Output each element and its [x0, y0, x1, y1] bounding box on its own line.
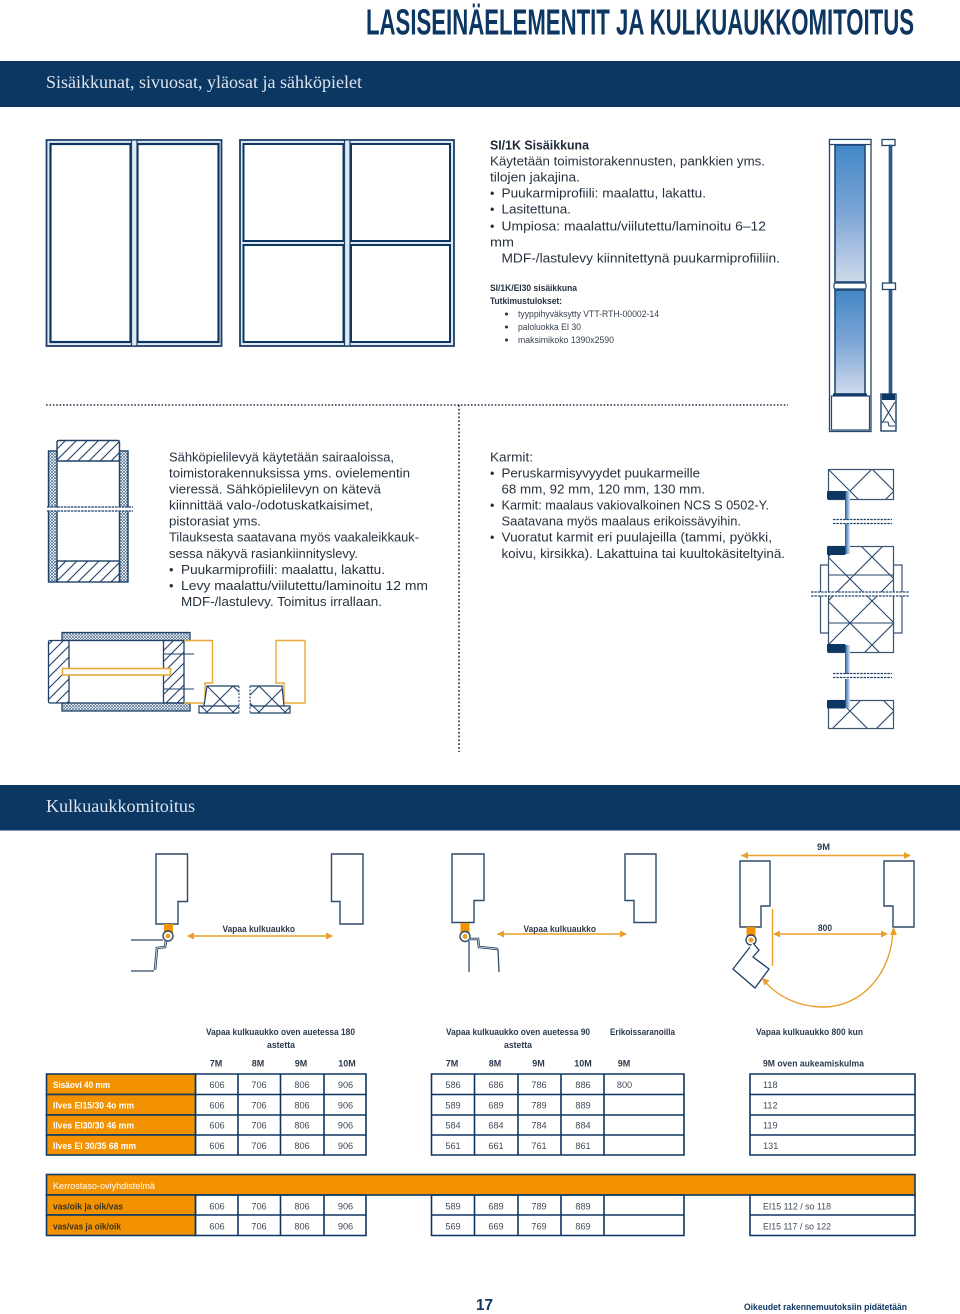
table: opening angle values — [750, 1074, 915, 1155]
text: SI/1K Sisäikkuna: MDF-/lastulevy kiinnitettynä puukarmiprofiiliin. — [502, 252, 780, 266]
table: 90 degree values — [432, 1074, 684, 1155]
table: 90 degree values: 786 — [531, 1080, 547, 1090]
table headers: 800 opening: 9M oven aukeamiskulma — [763, 1058, 865, 1068]
text: Sähköpielilevy — [169, 450, 428, 609]
table headers: 800 opening: Vapaa kulkuaukko 800 kun — [756, 1027, 863, 1037]
table: 90 degree values: 884 — [575, 1120, 591, 1130]
table: combination 180 degree values: 806 — [294, 1202, 310, 1212]
table headers: 180 degrees: 8M — [252, 1058, 264, 1068]
text: Sähköpielilevy: Levy maalattu/viilutettu/laminoitu 12 mm — [181, 579, 428, 593]
text: Sähköpielilevy: • — [169, 563, 173, 577]
table: 180 degree values: 806 — [294, 1120, 310, 1130]
text: Sähköpielilevy: toimistorakennuksissa yms. ovielementin — [169, 466, 410, 480]
table: opening angle values: 119 — [763, 1120, 778, 1130]
table: combination 90 degree values: 689 — [488, 1202, 504, 1212]
table: combination 90 degree values: 889 — [575, 1202, 591, 1212]
table band: Kerrostaso-oviyhdistelmä — [46, 1174, 915, 1195]
table: combination 90 degree values: 569 — [445, 1222, 461, 1232]
diagram: door opening 90 degrees: Vapaa kulkuaukko — [524, 924, 596, 934]
footer note: Oikeudet rakennemuutoksiin pidätetään — [744, 1302, 907, 1312]
table: combination 90 degree values: 669 — [488, 1222, 504, 1232]
text: Sähköpielilevy: vieressä. Sähköpielilevyn on kätevä — [169, 482, 382, 496]
text: Karmit: Saatavana myös maalaus erikoissävyihin. — [502, 514, 741, 528]
text: SI/1K Sisäikkuna: • — [490, 186, 494, 200]
text: SI/1K Sisäikkuna: Puukarmiprofiili: maalattu, lakattu. — [502, 186, 706, 200]
text: Sähköpielilevy: Puukarmiprofiili: maalattu, lakattu. — [181, 563, 385, 577]
table: 90 degree values: 589 — [445, 1100, 461, 1110]
table: 180 degree values: 606 — [209, 1120, 225, 1130]
divider: horizontal dotted — [46, 404, 788, 406]
drawing: jamb panel vertical section — [46, 440, 134, 582]
table: combination 90 degree values — [432, 1195, 684, 1236]
diagram: door opening 90 degrees — [452, 854, 656, 972]
table headers: 90 degrees: 9M — [532, 1058, 545, 1068]
table: combination 90 degree values: 769 — [531, 1222, 547, 1232]
table: 90 degree values: 861 — [575, 1141, 591, 1151]
diagram: door opening with 800 clear passage: 9M — [817, 842, 830, 852]
text: SI/1K Sisäikkuna: • — [490, 220, 494, 234]
table headers: 90 degrees: 8M — [489, 1058, 501, 1068]
table: 180 degree values: 906 — [338, 1080, 353, 1090]
table headers: 90 degrees: 7M — [446, 1058, 458, 1068]
table headers: 90 degrees: astetta — [504, 1040, 533, 1050]
table headers: 800 opening — [756, 1027, 865, 1068]
text: SI/1K/EI30 test results: paloluokka EI 30 — [518, 322, 581, 332]
table: 180 degree values: 806 — [294, 1080, 310, 1090]
table: door types: Ilves EI30/30 46 mm — [53, 1120, 134, 1130]
diagram: door opening 180 degrees — [131, 854, 363, 971]
text: SI/1K Sisäikkuna — [490, 138, 780, 266]
section band: Sisäikkunat — [0, 61, 960, 107]
table: 180 degree values: 906 — [338, 1100, 353, 1110]
table: combination 180 degree values: 706 — [251, 1222, 267, 1232]
drawing: transom and side light section — [811, 470, 909, 728]
text: Karmit: Peruskarmisyvyydet puukarmeille — [502, 466, 700, 480]
text: SI/1K Sisäikkuna: tilojen jakajina. — [490, 170, 580, 184]
table: 90 degree values: 800 — [617, 1080, 632, 1090]
text: SI/1K/EI30 test results: SI/1K/EI30 sisäikkuna — [490, 283, 577, 293]
text: SI/1K/EI30 test results — [490, 283, 659, 345]
text: Sähköpielilevy: kiinnittää valo-/odotuskatkaisimet, — [169, 498, 373, 512]
table: 90 degree values: 784 — [531, 1120, 547, 1130]
drawing: side window elevation — [830, 140, 871, 432]
text: Sähköpielilevy: MDF-/lastulevy. Toimitus irrallaan. — [181, 595, 382, 609]
table headers: 90 degrees: Erikoissaranoilla — [610, 1027, 676, 1037]
table headers: 180 degrees: Vapaa kulkuaukko oven auetessa 180 — [206, 1027, 355, 1037]
table: combination 90 degree values: 869 — [575, 1222, 591, 1232]
table headers: 180 degrees: astetta — [267, 1040, 296, 1050]
text: Sähköpielilevy: pistorasiat yms. — [169, 514, 261, 528]
table: 180 degree values: 606 — [209, 1141, 225, 1151]
table: 90 degree values: 761 — [531, 1141, 547, 1151]
text: SI/1K Sisäikkuna: Käytetään toimistorakennusten, pankkien yms. — [490, 154, 765, 168]
text: Karmit: Karmit: maalaus vakiovalkoinen NCS S 0502-Y. — [502, 498, 769, 512]
table: 90 degree values: 586 — [445, 1080, 461, 1090]
table: combination 180 degree values: 906 — [338, 1202, 353, 1212]
drawing: four-pane window — [240, 140, 454, 346]
table: opening angle values: 131 — [763, 1141, 778, 1151]
table: 90 degree values: 661 — [488, 1141, 504, 1151]
text: SI/1K Sisäikkuna: Umpiosa: maalattu/viilutettu/laminoitu 6–12 — [502, 220, 766, 234]
table: 180 degree values: 706 — [251, 1080, 267, 1090]
table: 90 degree values: 689 — [488, 1100, 504, 1110]
table headers: 180 degrees: 10M — [338, 1058, 356, 1068]
text: Sähköpielilevy: Tilauksesta saatavana myös vaakaleikkauk- — [169, 530, 419, 544]
section band: Kulkuaukkomitoitus — [0, 785, 960, 830]
table: door types: Sisäovi 40 mm — [53, 1080, 110, 1090]
text: Karmit: Vuoratut karmit eri puulajeilla (tammi, pyökki, — [502, 530, 772, 544]
table: door types — [46, 1074, 196, 1155]
text: Karmit: Karmit: — [490, 450, 533, 464]
page number: 17 — [476, 1297, 493, 1314]
table: combination 90 degree values: 589 — [445, 1202, 461, 1212]
table: combination 180 degree values: 806 — [294, 1222, 310, 1232]
table: 90 degree values: 886 — [575, 1080, 591, 1090]
table headers: 90 degrees — [446, 1027, 676, 1068]
text: Karmit — [490, 450, 785, 561]
table headers: 90 degrees: 10M — [574, 1058, 592, 1068]
table headers: 180 degrees: 7M — [210, 1058, 222, 1068]
table: combination 180 degree values — [196, 1195, 366, 1236]
table: 180 degree values: 806 — [294, 1100, 310, 1110]
divider: vertical dotted — [458, 405, 460, 752]
table: combination 180 degree values: 906 — [338, 1222, 353, 1232]
table: combination rows labels — [46, 1195, 196, 1236]
table: 180 degree values: 606 — [209, 1100, 225, 1110]
text: Sähköpielilevy: • — [169, 579, 173, 593]
text: SI/1K Sisäikkuna: SI/1K Sisäikkuna — [490, 138, 590, 152]
text: Sähköpielilevy: sessa näkyvä rasiankiinnityslevy. — [169, 547, 358, 561]
table: 90 degree values: 889 — [575, 1100, 591, 1110]
table: 180 degree values: 806 — [294, 1141, 310, 1151]
text: Karmit: • — [490, 466, 494, 480]
text: Karmit: 68 mm, 92 mm, 120 mm, 130 mm. — [502, 482, 705, 496]
table: opening angle values: 118 — [763, 1080, 778, 1090]
table headers: 180 degrees — [206, 1027, 356, 1068]
text: SI/1K Sisäikkuna: mm — [490, 236, 514, 250]
table: combination opening angle values — [750, 1195, 915, 1236]
table headers: 180 degrees: 9M — [295, 1058, 307, 1068]
table: combination opening angle values: EI15 112 / so 118 — [763, 1202, 831, 1212]
table: combination rows labels: vas/vas ja oik/oik — [53, 1222, 122, 1232]
table: 90 degree values: 561 — [445, 1141, 461, 1151]
table: 180 degree values: 706 — [251, 1141, 267, 1151]
text: Sähköpielilevy: Sähköpielilevyä käytetään sairaaloissa, — [169, 450, 394, 464]
section band: Kulkuaukkomitoitus: Kulkuaukkomitoitus — [46, 796, 195, 816]
table: opening angle values: 112 — [763, 1100, 778, 1110]
table headers: 90 degrees: Vapaa kulkuaukko oven auetessa 90 — [446, 1027, 590, 1037]
drawing: jamb panel horizontal section — [48, 632, 305, 713]
table: 180 degree values: 906 — [338, 1141, 353, 1151]
table: combination opening angle values: EI15 117 / so 122 — [763, 1222, 831, 1232]
table: combination 90 degree values: 789 — [531, 1202, 547, 1212]
table: door types: Ilves EI 30/35 68 mm — [53, 1141, 136, 1151]
table: 90 degree values: 686 — [488, 1080, 504, 1090]
text: Karmit: • — [490, 530, 494, 544]
table: 90 degree values: 684 — [488, 1120, 504, 1130]
table: combination 180 degree values: 606 — [209, 1222, 225, 1232]
table: 180 degree values: 706 — [251, 1100, 267, 1110]
table: 180 degree values: 906 — [338, 1120, 353, 1130]
diagram: door opening 180 degrees: Vapaa kulkuaukko — [222, 924, 295, 934]
table: combination 180 degree values: 606 — [209, 1202, 225, 1212]
table headers: 90 degrees: 9M — [618, 1058, 630, 1068]
text: SI/1K/EI30 test results: tyyppihyväksytty VTT-RTH-00002-14 — [518, 309, 659, 319]
table: 180 degree values — [196, 1074, 366, 1155]
section band: Sisäikkunat: Sisäikkunat, sivuosat, yläosat ja sähköpielet — [46, 72, 362, 92]
text: SI/1K Sisäikkuna: • — [490, 202, 494, 216]
text: SI/1K Sisäikkuna: Lasitettuna. — [502, 202, 571, 216]
table band: Kerrostaso-oviyhdistelmä: Kerrostaso-oviyhdistelmä — [53, 1181, 156, 1191]
table: 90 degree values: 789 — [531, 1100, 547, 1110]
text: SI/1K/EI30 test results: Tutkimustulokset: — [490, 296, 562, 306]
text: Karmit: • — [490, 498, 494, 512]
table: door types: Ilves EI15/30 4o mm — [53, 1100, 134, 1110]
diagram: door opening with 800 clear passage — [733, 842, 914, 1007]
text: Karmit: koivu, kirsikka). Lakattuina tai kuultokäsiteltyinä. — [502, 547, 785, 561]
text: SI/1K/EI30 test results: maksimikoko 1390x2590 — [518, 335, 614, 345]
table: combination rows labels: vas/oik ja oik/vas — [53, 1202, 123, 1212]
table: 90 degree values: 584 — [445, 1120, 461, 1130]
table: 180 degree values: 606 — [209, 1080, 225, 1090]
drawing: side window section — [881, 140, 896, 431]
drawing: two-pane window — [46, 140, 222, 346]
table: 180 degree values: 706 — [251, 1120, 267, 1130]
diagram: door opening with 800 clear passage: 800 — [818, 923, 832, 933]
table: combination 180 degree values: 706 — [251, 1202, 267, 1212]
